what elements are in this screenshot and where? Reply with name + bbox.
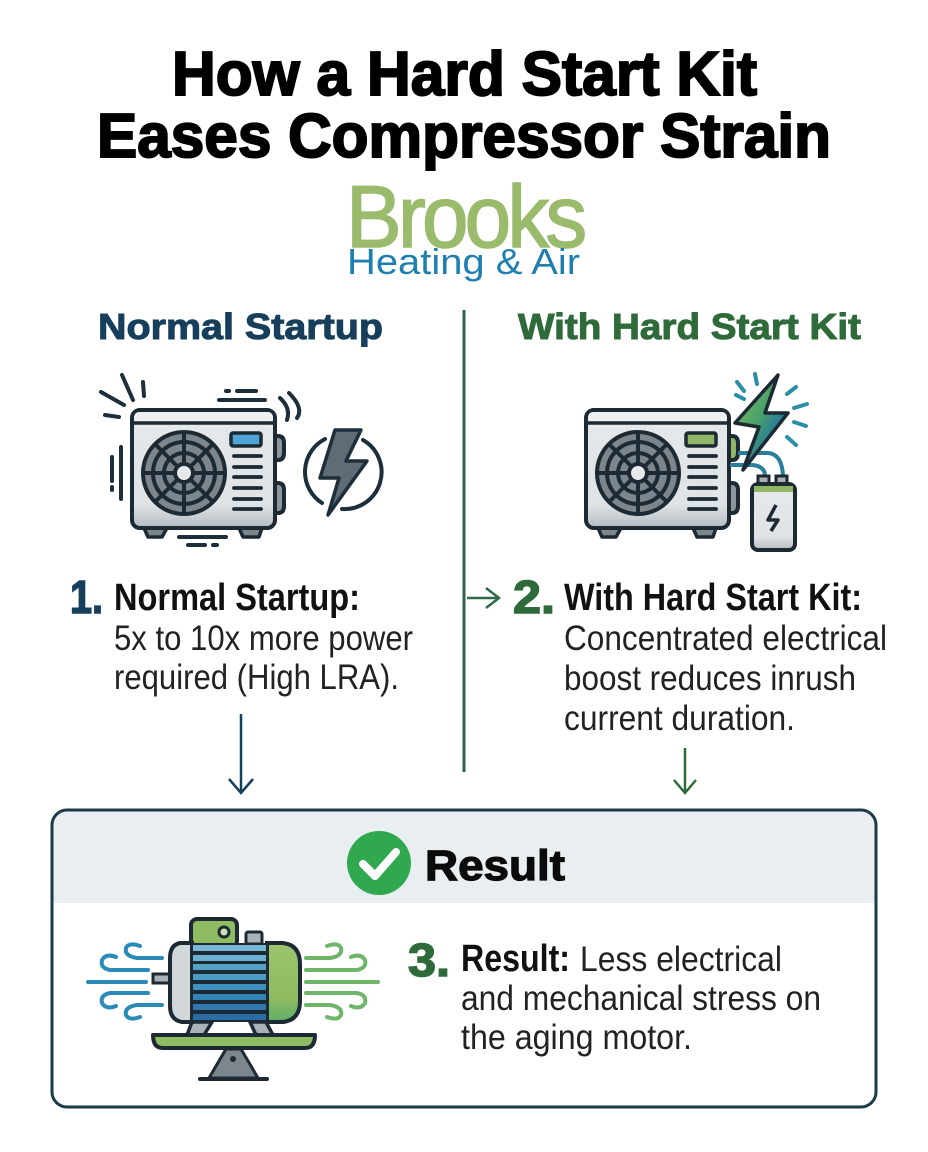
title: Eases Compressor Strain	[97, 102, 831, 171]
icon: motor on balance	[88, 919, 378, 1079]
step 2: With Hard Start Kit: current duration.	[564, 699, 795, 738]
logo: Brooks Heating & Air: Heating & Air	[347, 241, 580, 282]
step 3: result text: Result:	[461, 938, 570, 980]
icon: AC unit with hard start capacitor	[586, 374, 807, 550]
logo: Brooks Heating & Air: Brooks	[346, 168, 584, 266]
title	[97, 40, 831, 171]
step 1: Normal Startup	[70, 571, 413, 697]
title: How a Hard Start Kit	[172, 40, 757, 109]
step 1: Normal Startup: 1.	[70, 571, 103, 623]
step 2: With Hard Start Kit: Concentrated electrical	[564, 619, 887, 658]
step 3: result text: Less electrical	[580, 940, 782, 979]
arrow: down to result right	[674, 748, 696, 793]
step 1: Normal Startup: required (High LRA).	[114, 658, 399, 697]
heading: With Hard Start Kit: With Hard Start Kit	[518, 306, 861, 347]
step 2: With Hard Start Kit	[513, 571, 887, 738]
result heading: Result	[425, 842, 565, 890]
step 2: With Hard Start Kit: With Hard Start Kit:	[564, 577, 862, 619]
icon: check mark	[347, 831, 411, 895]
step 3: result text	[408, 934, 821, 1057]
arrow: to step 2	[467, 588, 499, 608]
arrow: down to result left	[229, 714, 253, 793]
step 1: Normal Startup: 5x to 10x more power	[114, 619, 413, 658]
step 3: result text: the aging motor.	[461, 1018, 692, 1057]
step 2: With Hard Start Kit: 2.	[513, 571, 555, 623]
step 3: result text: 3.	[408, 934, 450, 986]
step 1: Normal Startup: Normal Startup:	[114, 577, 360, 619]
panel: result	[52, 810, 876, 1107]
step 3: result text: and mechanical stress on	[461, 979, 821, 1018]
icon: vibrating AC unit with lightning	[101, 375, 382, 545]
center divider	[462, 310, 466, 772]
step 2: With Hard Start Kit: boost reduces inrush	[564, 659, 856, 698]
heading: Normal Startup: Normal Startup	[98, 306, 383, 347]
